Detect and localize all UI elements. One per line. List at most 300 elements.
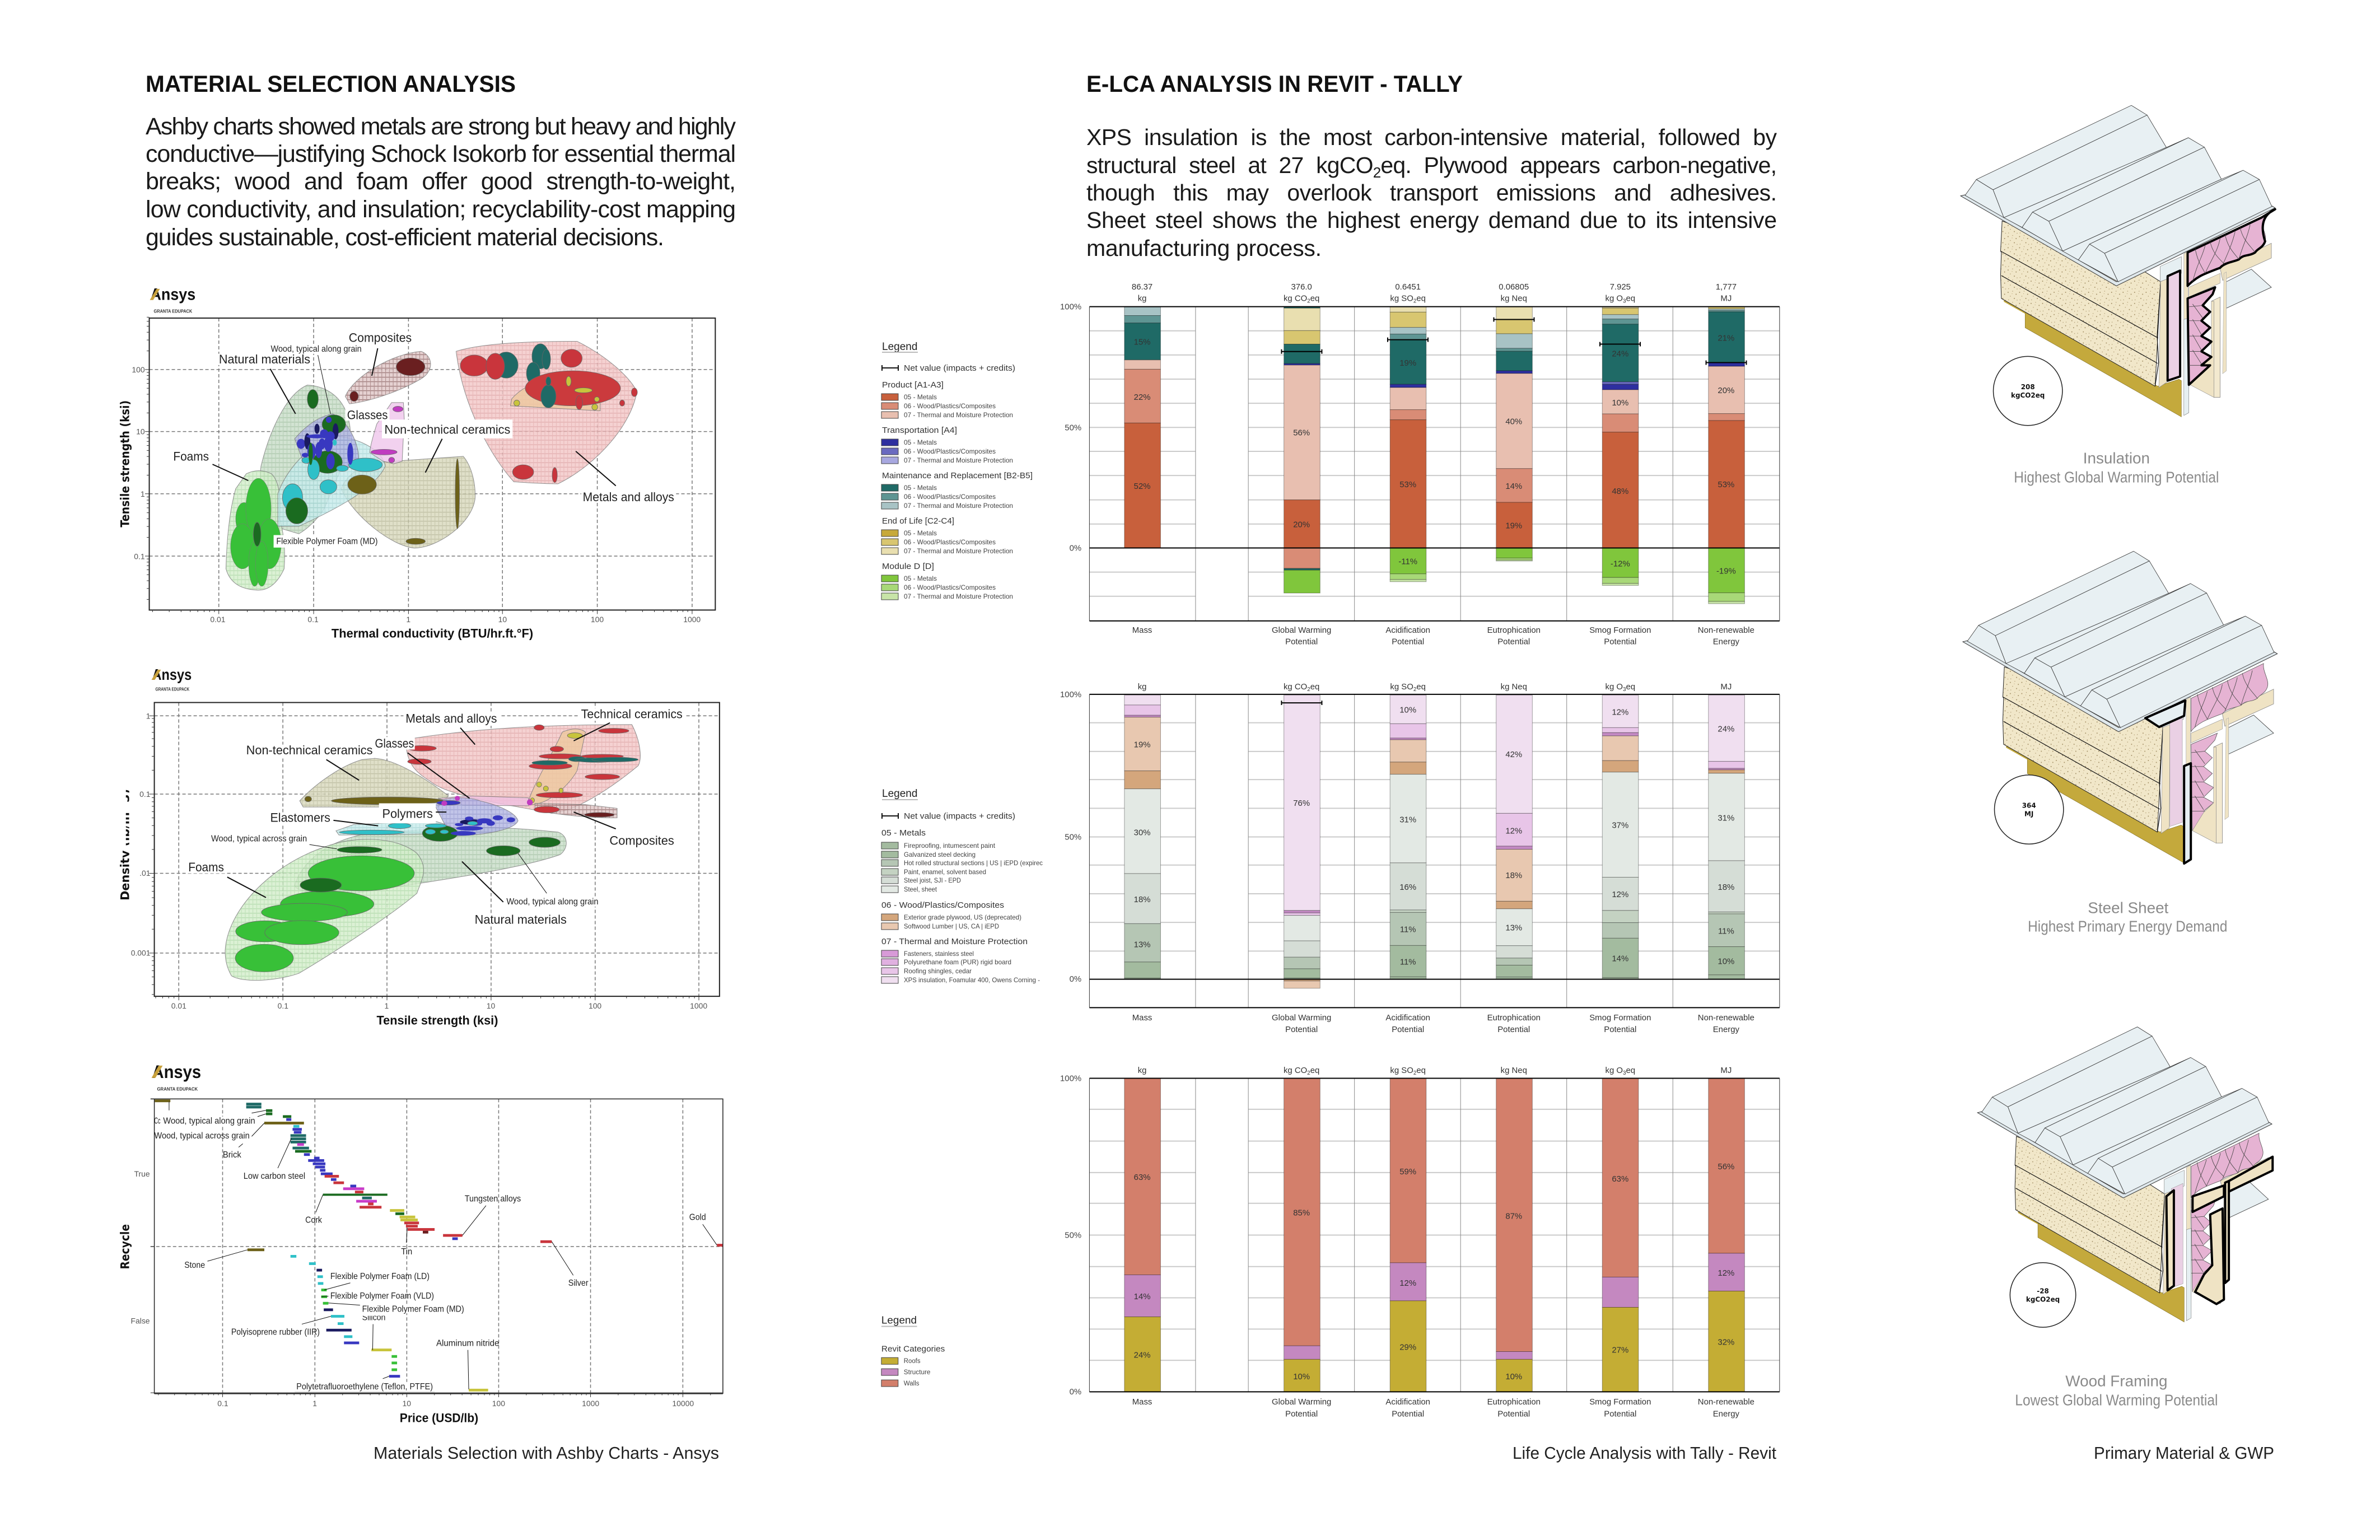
- chart values and labels: 18%: [1134, 895, 1151, 904]
- axis ticks and titles: 0.1: [134, 552, 145, 561]
- panel: insulation detail: [1961, 105, 2275, 486]
- chart values and labels: kg O: [1605, 1066, 1623, 1075]
- chart values and labels: Potential: [1392, 637, 1424, 647]
- chart values and labels: 0%: [1070, 1387, 1081, 1397]
- chart values and labels: [1060, 682, 1754, 1034]
- bar: Mass: [1124, 695, 1160, 979]
- chart values and labels: 10%: [1505, 1372, 1522, 1382]
- axis ticks and titles: Recycle: [119, 1224, 132, 1270]
- chart values and labels: 50%: [1065, 832, 1081, 842]
- axis ticks and titles: 1: [312, 1399, 317, 1408]
- bar: Eutrophication Potential: [1496, 1079, 1532, 1392]
- labels: materials: Wood, typical along grain: [163, 1116, 255, 1126]
- caption: Ashby charts source: Materials Selection with Ashby Charts - Ansys: [374, 1443, 719, 1463]
- text block: material selection summary: conductive—justifying Schock Isokorb for essential thermal: [146, 141, 736, 167]
- legend: materials: Fasteners, stainless steel: [904, 950, 974, 958]
- chart values and labels: 0%: [1070, 974, 1081, 984]
- chart values and labels: 10%: [1399, 706, 1416, 715]
- labels: materials: Tin: [401, 1247, 412, 1257]
- chart values and labels: 2: [1307, 687, 1310, 693]
- chart values and labels: Acidification: [1385, 1013, 1430, 1023]
- chart values and labels: kg SO: [1390, 682, 1413, 692]
- chart values and labels: 42%: [1505, 750, 1522, 759]
- plot area: material property bubbles: [145, 317, 716, 614]
- chart values and labels: 12%: [1612, 708, 1628, 717]
- chart values and labels: 50%: [1065, 423, 1081, 433]
- chart values and labels: eq: [1416, 1066, 1426, 1075]
- net value markers: [1281, 318, 1747, 365]
- drawing: isometric roof-wall assembly, steel sheet highlighted: [1963, 551, 2278, 864]
- caption: steel sheet: [2028, 899, 2227, 935]
- labels: materials: Cc: [155, 1116, 160, 1126]
- labels: materials: Cork: [305, 1215, 322, 1225]
- logo: Ansys: GRANTA EDUPACK: [156, 687, 189, 692]
- bar: Mass: [1124, 307, 1160, 548]
- labels: material families: Foams: [173, 449, 209, 463]
- legend: materials: Net value (impacts + credits): [904, 811, 1015, 821]
- legend: life cycle stages: 05 - Metals: [904, 529, 937, 537]
- chart values and labels: 18%: [1718, 883, 1734, 892]
- chart values and labels: 14%: [1134, 1292, 1151, 1301]
- chart values and labels: kg CO: [1284, 682, 1307, 692]
- legend: Revit categories: [881, 1315, 945, 1387]
- text block: material selection summary: guides sustainable, cost-efficient material decisions.: [146, 224, 664, 251]
- chart values and labels: eq: [1416, 682, 1426, 692]
- legend: materials: Steel, sheet: [904, 885, 937, 893]
- legend: life cycle stages: Transportation [A4]: [882, 426, 957, 435]
- chart values and labels: Acidification: [1385, 626, 1430, 635]
- chart values and labels: 11%: [1400, 957, 1416, 967]
- chart values and labels: Potential: [1285, 1025, 1318, 1034]
- legend: life cycle stages: Legend: [882, 341, 917, 353]
- chart: Ashby tensile strength vs thermal conductivity: [120, 288, 716, 640]
- chart values and labels: 24%: [1612, 349, 1628, 358]
- chart values and labels: kg Neq: [1501, 1066, 1527, 1075]
- chart values and labels: 376.0: [1291, 282, 1312, 292]
- bar: Eutrophication Potential: [1496, 695, 1532, 979]
- chart values and labels: 30%: [1134, 828, 1151, 838]
- chart values and labels: 87%: [1505, 1212, 1522, 1221]
- legend: life cycle stages: 07 - Thermal and Moisture Protection: [904, 502, 1013, 510]
- legend: materials: [881, 788, 1043, 984]
- legend: life cycle stages: 06 - Wood/Plastics/Composites: [904, 447, 996, 455]
- legend: life cycle stages: 05 - Metals: [904, 484, 937, 492]
- labels: materials: Aluminum nitride: [436, 1338, 500, 1348]
- chart values and labels: Eutrophication: [1487, 1397, 1541, 1407]
- text block: E-LCA summary: structural steel at 27 kgCO: [1086, 152, 1374, 178]
- chart values and labels: Mass: [1132, 626, 1152, 635]
- axis ticks and titles: 100: [492, 1399, 505, 1408]
- chart values and labels: kg Neq: [1501, 294, 1527, 304]
- axis ticks and titles: Tensile strength (ksi): [377, 1014, 498, 1028]
- chart values and labels: 100%: [1060, 1074, 1081, 1084]
- chart values and labels: 7.925: [1610, 282, 1631, 292]
- legend: materials: Paint, enamel, solvent based: [904, 868, 986, 876]
- chart values and labels: 14%: [1612, 954, 1628, 963]
- chart values and labels: Eutrophication: [1487, 1013, 1541, 1023]
- chart values and labels: -19%: [1716, 566, 1736, 576]
- chart values and labels: 53%: [1718, 480, 1734, 489]
- chart values and labels: 2: [1413, 298, 1417, 305]
- chart values and labels: Eutrophication: [1487, 626, 1541, 635]
- drawing: isometric roof-wall assembly, wood framing highlighted: [1977, 1027, 2272, 1322]
- labels: materials: Gold: [689, 1213, 706, 1222]
- axis ticks and titles: 10: [403, 1399, 411, 1408]
- axis ticks and titles: 1: [406, 615, 410, 624]
- chart values and labels: 56%: [1293, 428, 1310, 438]
- legend: materials: Roofing shingles, cedar: [904, 967, 972, 975]
- legend: life cycle stages: 06 - Wood/Plastics/Composites: [904, 402, 996, 410]
- axis ticks and titles: 0.1: [307, 615, 319, 624]
- axis ticks and titles: 10: [498, 615, 507, 624]
- text block: E-LCA summary: XPS insulation is the most carbon-intensive material, followed by: [1086, 124, 1777, 150]
- chart values and labels: 18%: [1505, 871, 1522, 880]
- legend: materials: Steel joist, SJI - EPD: [904, 876, 961, 884]
- chart values and labels: 12%: [1399, 1278, 1416, 1288]
- chart values and labels: 19%: [1505, 521, 1522, 531]
- chart values and labels: 10%: [1293, 1372, 1310, 1382]
- legend: life cycle stages: 07 - Thermal and Moisture Protection: [904, 456, 1013, 464]
- labels: material families: Technical ceramics: [581, 707, 683, 721]
- labels: material families: Foams: [188, 860, 224, 874]
- chart values and labels: Global Warming: [1272, 1397, 1331, 1407]
- legend: life cycle stages: 05 - Metals: [904, 438, 937, 446]
- chart values and labels: 53%: [1399, 480, 1416, 489]
- chart values and labels: Smog Formation: [1589, 1397, 1651, 1407]
- chart values and labels: 1,777: [1716, 282, 1737, 292]
- labels: material families: Wood, typical along grain: [270, 344, 362, 354]
- labels: material families: Glasses: [347, 408, 388, 422]
- legend: life cycle stages: 05 - Metals: [904, 575, 937, 582]
- chart values and labels: Potential: [1285, 1410, 1318, 1419]
- labels: materials: Brick: [223, 1150, 241, 1160]
- labels: materials: Low carbon steel: [244, 1172, 305, 1181]
- labels: material families: Polymers: [382, 807, 433, 821]
- text block: E-LCA summary: eq. Plywood appears carbon-negative,: [1380, 152, 1777, 178]
- caption: insulation: Insulation: [2083, 449, 2150, 466]
- text block: material selection summary: breaks; wood and foam offer good strength-to-weight,: [146, 168, 736, 195]
- axis ticks and titles: False: [131, 1317, 150, 1326]
- chart values and labels: Non-renewable: [1698, 626, 1754, 635]
- legend: life cycle stages: 05 - Metals: [904, 393, 937, 401]
- chart values and labels: 19%: [1399, 358, 1416, 368]
- caption: wood framing: Lowest Global Warming Potential: [2015, 1391, 2218, 1408]
- axis ticks and titles: [119, 365, 701, 641]
- chart values and labels: 76%: [1293, 799, 1310, 808]
- logo: Ansys: GRANTA EDUPACK: [154, 309, 192, 314]
- chart values and labels: 2: [1413, 687, 1417, 693]
- chart values and labels: 15%: [1134, 337, 1151, 347]
- legend: materials: 07 - Thermal and Moisture Protection: [881, 937, 1028, 946]
- chart values and labels: Global Warming: [1272, 1013, 1331, 1023]
- chart values and labels: -11%: [1398, 557, 1417, 566]
- axis ticks and titles: 0.01: [210, 615, 226, 624]
- chart values and labels: 11%: [1718, 927, 1734, 936]
- heading: material selection analysis: MATERIAL SELECTION ANALYSIS: [146, 71, 516, 97]
- axis ticks and titles: 1: [141, 489, 145, 498]
- axis ticks and titles: 100: [591, 615, 604, 624]
- text block: E-LCA summary: Sheet steel shows the highest energy demand due to its intensive: [1086, 207, 1777, 233]
- legend: materials: Galvanized steel decking: [904, 851, 976, 858]
- chart values and labels: 0.6451: [1395, 282, 1421, 292]
- bar: Eutrophication Potential: [1496, 307, 1532, 561]
- axis ticks and titles: 0.1: [217, 1399, 228, 1408]
- bar: Mass: [1124, 1079, 1160, 1392]
- labels: material families: Glasses: [375, 736, 414, 750]
- labels: materials: Flexible Polymer Foam (VLD): [330, 1291, 434, 1301]
- chart values and labels: 20%: [1293, 520, 1310, 530]
- legend: materials: XPS insulation, Foamular 400, Owens Corning -: [904, 976, 1040, 984]
- chart values and labels: Mass: [1132, 1013, 1152, 1023]
- legend: life cycle stages: Maintenance and Replacement [B2-B5]: [882, 471, 1033, 480]
- chart: LCA impacts by material: [1060, 682, 1780, 1034]
- axis ticks and titles: 1: [146, 711, 151, 720]
- labels: materials: Flexible Polymer Foam (LD): [330, 1272, 430, 1281]
- legend: life cycle stages: 06 - Wood/Plastics/Composites: [904, 493, 996, 501]
- caption: wood framing: [2015, 1373, 2218, 1408]
- axis ticks and titles: [115, 711, 707, 1028]
- legend: life cycle stages: Module D [D]: [882, 562, 934, 571]
- axis ticks and titles: [119, 1169, 694, 1425]
- labels: material families: Metals and alloys: [583, 490, 674, 504]
- bar: Smog Formation Potential: [1602, 1079, 1639, 1392]
- chart values and labels: [1060, 282, 1754, 647]
- labels: material families: [188, 707, 683, 927]
- chart values and labels: 3: [1623, 687, 1626, 693]
- chart values and labels: Potential: [1604, 1025, 1636, 1034]
- plot area: material property bubbles: [149, 702, 720, 1000]
- chart values and labels: Non-renewable: [1698, 1013, 1754, 1023]
- text block: E-LCA summary: 2: [1373, 164, 1381, 181]
- chart values and labels: Potential: [1392, 1410, 1424, 1419]
- chart values and labels: Potential: [1604, 1410, 1636, 1419]
- bar: Global Warming Potential: [1284, 695, 1320, 988]
- chart values and labels: Potential: [1285, 637, 1318, 647]
- stacked bars: [1089, 694, 1780, 1007]
- chart values and labels: 12%: [1718, 1268, 1734, 1278]
- chart values and labels: Smog Formation: [1589, 1013, 1651, 1023]
- legend: materials: Fireproofing, intumescent paint: [904, 842, 996, 850]
- logo: Ansys: [152, 666, 192, 692]
- labels: material families: Composites: [609, 833, 674, 847]
- text block: material selection summary: low conductivity, and insulation; recyclability-cost mapping: [146, 196, 736, 223]
- axis ticks and titles: 1: [385, 1001, 389, 1010]
- labels: materials: [155, 1116, 706, 1392]
- chart values and labels: 0.06805: [1499, 282, 1529, 292]
- chart values and labels: kg O: [1605, 682, 1623, 692]
- logo: Ansys: Ansys: [152, 666, 192, 683]
- legend: Revit categories: Revit Categories: [881, 1344, 945, 1354]
- chart values and labels: 31%: [1718, 814, 1734, 823]
- legend: life cycle stages: 07 - Thermal and Moisture Protection: [904, 411, 1013, 419]
- chart values and labels: 2: [1307, 298, 1310, 305]
- bar: Smog Formation Potential: [1602, 307, 1639, 585]
- chart values and labels: [1060, 1066, 1754, 1419]
- chart values and labels: 14%: [1505, 482, 1522, 491]
- chart values and labels: kg: [1138, 1066, 1146, 1075]
- axis ticks and titles: 10: [487, 1001, 495, 1010]
- legend: life cycle stages: Product [A1-A3]: [882, 380, 944, 390]
- chart values and labels: 56%: [1718, 1162, 1734, 1172]
- chart values and labels: 86.37: [1132, 282, 1152, 292]
- chart values and labels: 3: [1623, 1070, 1626, 1076]
- heading: E-LCA analysis: E-LCA ANALYSIS IN REVIT - TALLY: [1086, 71, 1463, 97]
- bar: Smog Formation Potential: [1602, 695, 1639, 979]
- chart values and labels: eq: [1310, 682, 1319, 692]
- chart values and labels: kg SO: [1390, 1066, 1413, 1075]
- legend: Revit categories: Legend: [881, 1315, 917, 1327]
- chart: LCA impacts by Revit category: [1060, 1066, 1780, 1419]
- labels: materials: Silicon: [362, 1313, 385, 1323]
- chart values and labels: eq: [1626, 682, 1635, 692]
- panel: wood framing detail: [1977, 1027, 2272, 1408]
- chart values and labels: eq: [1310, 294, 1319, 304]
- logo: Ansys: Ansys: [151, 286, 195, 304]
- text block: material selection summary: Ashby charts showed metals are strong but heavy and highly: [146, 113, 736, 140]
- logo: Ansys: GRANTA EDUPACK: [157, 1087, 198, 1092]
- chart values and labels: 63%: [1612, 1174, 1628, 1184]
- legend: materials: Legend: [882, 788, 917, 800]
- chart values and labels: kg CO: [1284, 294, 1307, 304]
- logo: Ansys: [152, 1061, 201, 1092]
- chart values and labels: 29%: [1399, 1342, 1416, 1352]
- chart values and labels: MJ: [1720, 294, 1732, 304]
- chart values and labels: 10%: [1612, 398, 1628, 408]
- chart values and labels: Potential: [1497, 1025, 1530, 1034]
- labels: material families: Wood, typical along grain: [506, 897, 599, 907]
- axis ticks and titles: 100: [132, 365, 145, 374]
- legend: materials: Polyurethane foam (PUR) rigid board: [904, 958, 1011, 966]
- axis ticks and titles: True: [134, 1169, 150, 1178]
- axis ticks and titles: 1000: [683, 615, 701, 624]
- bar: Acidification Potential: [1390, 307, 1426, 582]
- logo: Ansys: Ansys: [152, 1061, 201, 1082]
- chart values and labels: Energy: [1713, 637, 1740, 647]
- chart values and labels: kg: [1138, 682, 1146, 692]
- axis ticks and titles: 0.001: [131, 948, 151, 957]
- axis ticks and titles: 1000: [690, 1001, 707, 1010]
- chart values and labels: Energy: [1713, 1025, 1740, 1034]
- axis ticks and titles: 10000: [672, 1399, 694, 1408]
- caption: wood framing: Wood Framing: [2065, 1373, 2167, 1390]
- bar: Acidification Potential: [1390, 1079, 1426, 1392]
- chart values and labels: 2: [1413, 1070, 1417, 1076]
- chart values and labels: 0%: [1070, 544, 1081, 553]
- chart values and labels: 19%: [1134, 740, 1151, 749]
- caption: insulation: [2014, 449, 2219, 486]
- chart values and labels: Smog Formation: [1589, 626, 1651, 635]
- callout: energy value: 364: [2022, 802, 2036, 810]
- chart values and labels: kg CO: [1284, 1066, 1307, 1075]
- chart values and labels: -12%: [1611, 559, 1630, 568]
- axis ticks and titles: 0.1: [278, 1001, 288, 1010]
- legend: Revit categories: Walls: [904, 1379, 920, 1387]
- chart values and labels: 27%: [1612, 1345, 1628, 1355]
- chart values and labels: 85%: [1293, 1208, 1310, 1218]
- labels: materials: Polytetrafluoroethylene (Teflon, PTFE): [296, 1382, 433, 1392]
- chart values and labels: Acidification: [1385, 1397, 1430, 1407]
- chart values and labels: 59%: [1399, 1167, 1416, 1177]
- chart values and labels: 20%: [1718, 386, 1734, 395]
- chart values and labels: 37%: [1612, 821, 1628, 830]
- chart values and labels: kg: [1138, 294, 1146, 304]
- labels: material families: Composites: [349, 330, 412, 344]
- axis ticks and titles: 0.1: [139, 790, 151, 799]
- callout: GWP value: 208: [2021, 383, 2035, 391]
- legend: materials: 05 - Metals: [881, 828, 926, 838]
- caption: insulation: Highest Global Warming Potential: [2014, 468, 2219, 486]
- chart values and labels: 12%: [1505, 827, 1522, 836]
- chart values and labels: 13%: [1505, 923, 1522, 933]
- chart values and labels: 63%: [1134, 1173, 1151, 1182]
- text block: material selection summary: [146, 113, 736, 251]
- stacked bars: [1089, 307, 1780, 621]
- labels: material families: Flexible Polymer Foam (MD): [276, 537, 378, 547]
- legend: life cycle stages: 06 - Wood/Plastics/Composites: [904, 538, 996, 546]
- chart values and labels: 24%: [1718, 724, 1734, 734]
- chart values and labels: eq: [1310, 1066, 1319, 1075]
- bar: Global Warming Potential: [1284, 307, 1320, 593]
- labels: materials: Tungsten alloys: [465, 1194, 521, 1204]
- chart values and labels: 3: [1623, 298, 1626, 305]
- legend: life cycle stages: 07 - Thermal and Moisture Protection: [904, 592, 1013, 600]
- chart values and labels: 10%: [1718, 956, 1734, 966]
- legend: Revit categories: Roofs: [904, 1357, 921, 1365]
- chart values and labels: 11%: [1400, 925, 1416, 935]
- axis ticks and titles: Thermal conductivity (BTU/hr.ft.°F): [332, 627, 533, 641]
- chart values and labels: 52%: [1134, 482, 1151, 491]
- chart values and labels: 100%: [1060, 302, 1081, 312]
- chart values and labels: eq: [1416, 294, 1426, 304]
- labels: materials: Polyisoprene rubber (IIR): [231, 1327, 320, 1337]
- labels: material families: Elastomers: [270, 811, 330, 825]
- chart values and labels: 100%: [1060, 690, 1081, 699]
- chart values and labels: 40%: [1505, 417, 1522, 427]
- drawing: isometric roof-wall assembly, insulation highlighted: [1961, 105, 2275, 417]
- caption: steel sheet: Steel Sheet: [2088, 899, 2169, 917]
- labels: material families: Natural materials: [475, 913, 567, 927]
- chart values and labels: 16%: [1399, 883, 1416, 892]
- labels: materials: Flexible Polymer Foam (MD): [362, 1305, 464, 1314]
- chart values and labels: eq: [1626, 1066, 1635, 1075]
- chart values and labels: 50%: [1065, 1230, 1081, 1240]
- axis ticks and titles: 0.01: [135, 869, 151, 878]
- legend: materials: 06 - Wood/Plastics/Composites: [881, 900, 1004, 910]
- legend: materials: Hot rolled structural sections | US | iEPD (expirec: [904, 859, 1043, 867]
- axis ticks and titles: Density (lb/in^3): [119, 789, 132, 900]
- labels: material families: Metals and alloys: [405, 711, 497, 725]
- chart values and labels: 13%: [1134, 940, 1151, 950]
- labels: material families: Non-technical ceramics: [384, 423, 510, 437]
- stacked bars: [1089, 1079, 1780, 1392]
- labels: material families: Wood, typical across grain: [211, 834, 307, 843]
- chart values and labels: Global Warming: [1272, 626, 1331, 635]
- chart values and labels: Potential: [1497, 1410, 1530, 1419]
- chart values and labels: 31%: [1399, 815, 1416, 825]
- plot area: price range bars: [151, 1099, 771, 1397]
- bar: Non-renewable Energy: [1709, 695, 1744, 979]
- text block: E-LCA summary: [1086, 124, 1777, 261]
- chart values and labels: 21%: [1718, 333, 1734, 343]
- chart values and labels: Non-renewable: [1698, 1397, 1754, 1407]
- legend: life cycle stages: [881, 341, 1033, 600]
- axis ticks and titles: 1000: [582, 1399, 599, 1408]
- axis ticks and titles: Tensile strength (ksi): [119, 400, 132, 528]
- bar: Global Warming Potential: [1284, 1079, 1320, 1392]
- chart values and labels: Potential: [1604, 637, 1636, 647]
- axis ticks and titles: 100: [589, 1001, 601, 1010]
- text block: E-LCA summary: manufacturing process.: [1086, 235, 1322, 261]
